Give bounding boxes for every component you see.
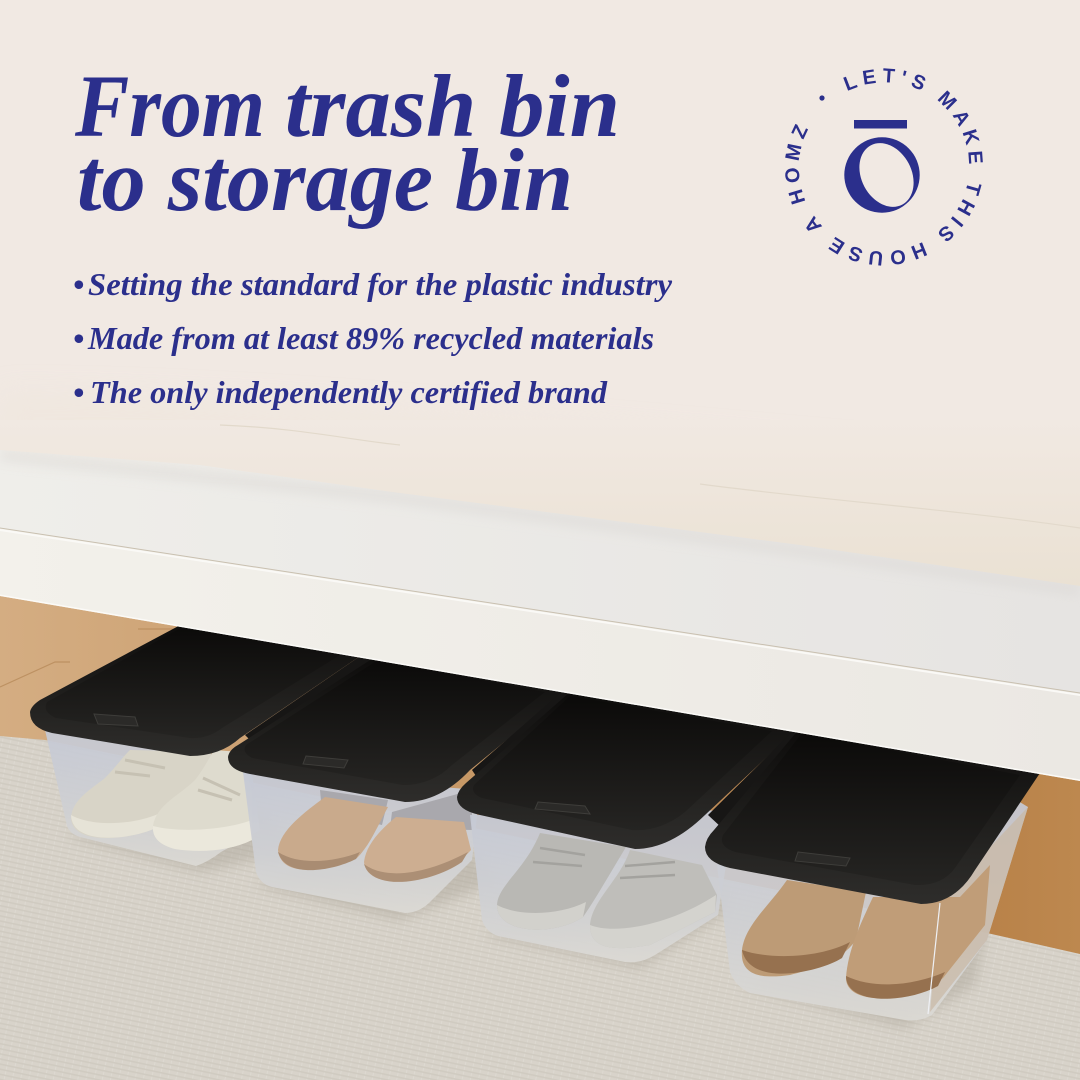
- bullet 2: •: [73, 320, 84, 356]
- logo bar: [854, 120, 907, 128]
- bin 4 shadow: [740, 935, 985, 1028]
- rug: [0, 736, 1080, 1080]
- bin 1 shoes: [71, 750, 252, 851]
- bullet 3: •: [73, 374, 84, 410]
- title line 1: trash bin: [285, 58, 620, 156]
- wood floor: [0, 590, 1080, 960]
- bin 1 shadow: [66, 800, 300, 872]
- title: [74, 58, 620, 230]
- mattress: [0, 440, 1080, 693]
- bin 2 lid: [228, 652, 568, 802]
- bullet 1: •: [73, 266, 84, 302]
- bin 3 lid: [457, 688, 798, 849]
- duvet: [0, 395, 1080, 586]
- bin 4 boots: [742, 865, 990, 999]
- bin 1 body: [45, 730, 260, 866]
- bin 3 body: [470, 810, 735, 962]
- bin 4 with tan boots: [705, 728, 1042, 1028]
- bin 4 body: [717, 790, 1028, 1020]
- bin 4 front edge highlight: [928, 903, 940, 1014]
- bullet 2: Made from at least 89% recycled materials: [87, 320, 654, 356]
- bin 2 with tan shoes: [228, 652, 568, 920]
- bin 2 shoes: [278, 797, 471, 882]
- bin 2 body: [243, 772, 480, 913]
- bin 2 shadow: [255, 820, 500, 920]
- separator dot: [819, 95, 825, 101]
- bullet list: [73, 266, 673, 410]
- bed frame: [0, 528, 1080, 781]
- bin 3 shadow: [485, 850, 730, 968]
- bin 3 with grey sneakers: [457, 688, 798, 968]
- bin 4 side tint: [930, 807, 1028, 1012]
- bin 1 with cream sneakers: [30, 622, 366, 872]
- bullet 3: The only independently certified brand: [90, 374, 608, 410]
- title line 1: From: [74, 58, 265, 156]
- bin 2 socks: [320, 790, 472, 830]
- title line 2: to storage bin: [77, 132, 573, 230]
- brand logo badge: [785, 68, 983, 266]
- circular slogan: LET'S MAKE THIS HOUSE A HOMZ: [785, 68, 983, 266]
- bin 4 lid: [705, 728, 1042, 904]
- bin 1 lid: [30, 622, 366, 756]
- logo ring: [844, 134, 924, 216]
- bullet 1: Setting the standard for the plastic industry: [88, 266, 673, 302]
- bin 3 shoes: [497, 833, 717, 948]
